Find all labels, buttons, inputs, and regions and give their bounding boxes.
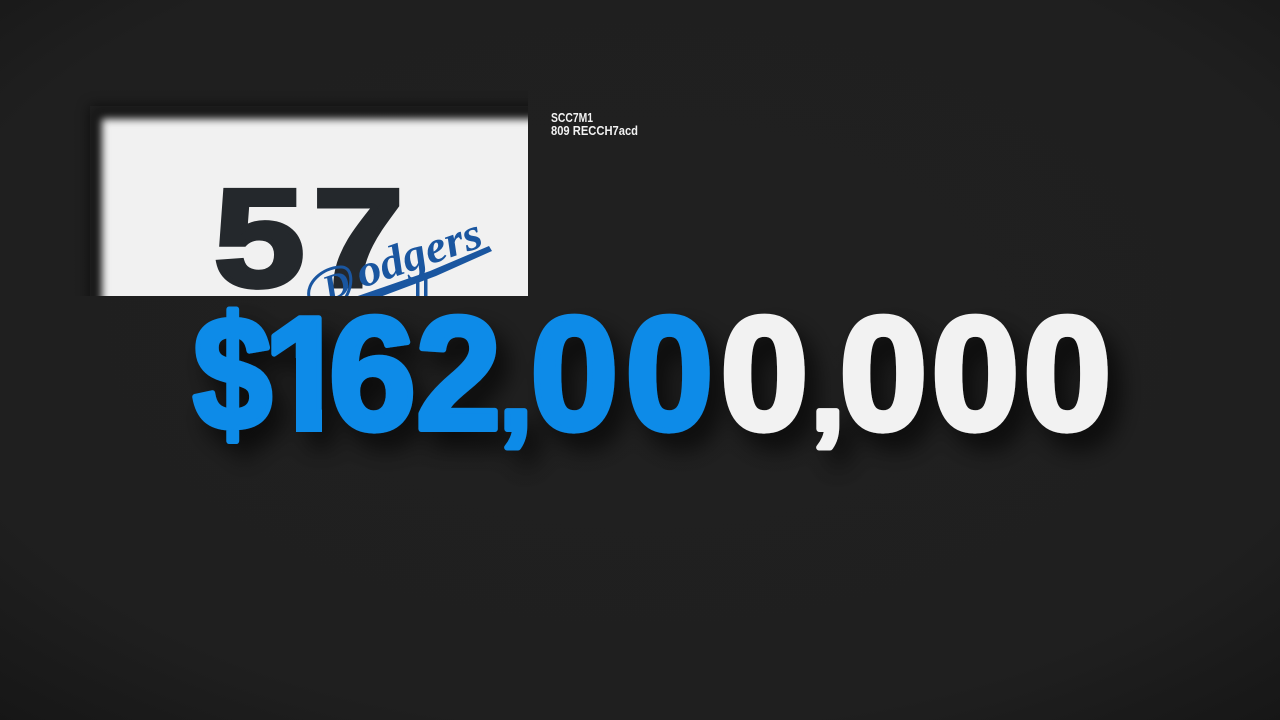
white part of the figure: 0 [1024,284,1111,463]
white part of the figure: , [811,321,844,455]
white part of the figure: 0 [840,284,927,463]
white part of the figure [720,284,1111,463]
icon: Dodgers script logo: odgers [349,208,488,297]
blue part of the figure: 0 [626,284,713,463]
blue part of the figure: 1 [264,283,346,463]
blue part of the figure: 6 [329,283,416,464]
blue part of the figure: $ [193,285,272,464]
caption text [551,110,638,138]
caption text: 809 RECCH7acd [551,123,638,138]
white part of the figure: 0 [932,284,1019,463]
blue part of the figure: , [499,321,532,455]
icon: Dodgers script logo [307,226,492,296]
jersey number 57: 7 [313,161,403,316]
icon: Dodgers script logo: D [317,262,355,309]
caption text: SCC7M1 [551,110,593,125]
blue part of the figure: 2 [416,284,501,464]
big figure: $162,000,000 [192,306,1123,461]
panel: white jersey card [88,104,528,296]
blue part of the figure: 0 [530,284,618,463]
white part of the figure: 0 [720,284,808,463]
jersey number 57 [216,188,400,290]
jersey number 57: 5 [214,161,304,316]
blue part of the figure [192,306,728,461]
